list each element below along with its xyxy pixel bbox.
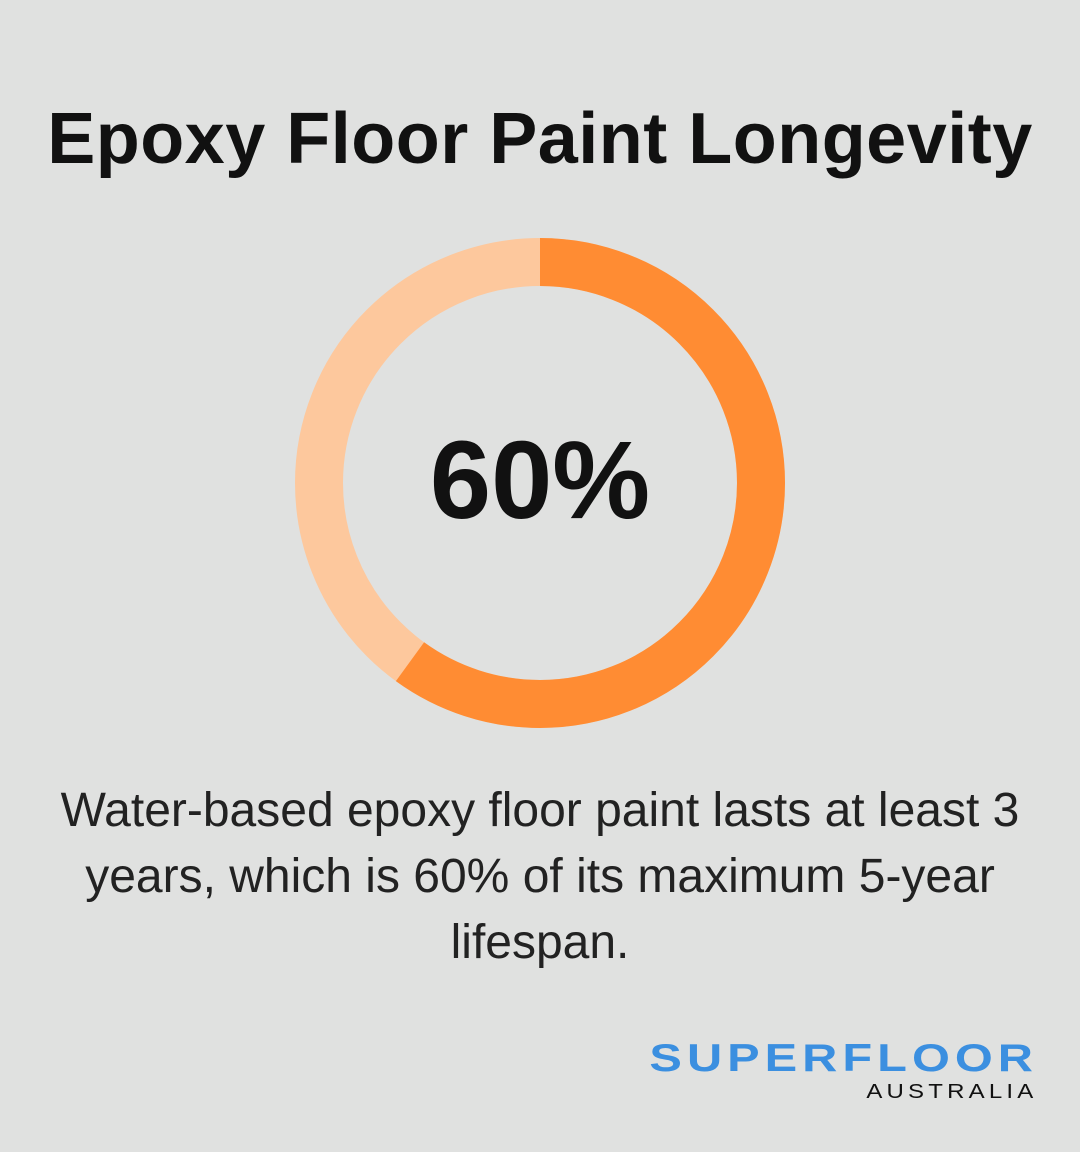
description text: lifespan. [451,916,629,969]
logo [649,1037,1038,1103]
description text [60,784,1019,969]
title: Epoxy Floor Paint Longevity [47,99,1033,179]
description text: years, which is 60% of its maximum 5-year [85,850,995,903]
logo: AUSTRALIA [866,1081,1038,1103]
logo: SUPERFLOOR [649,1037,1038,1080]
donut chart: 60% [430,419,650,542]
description text: Water-based epoxy floor paint lasts at least 3 [61,784,1019,837]
